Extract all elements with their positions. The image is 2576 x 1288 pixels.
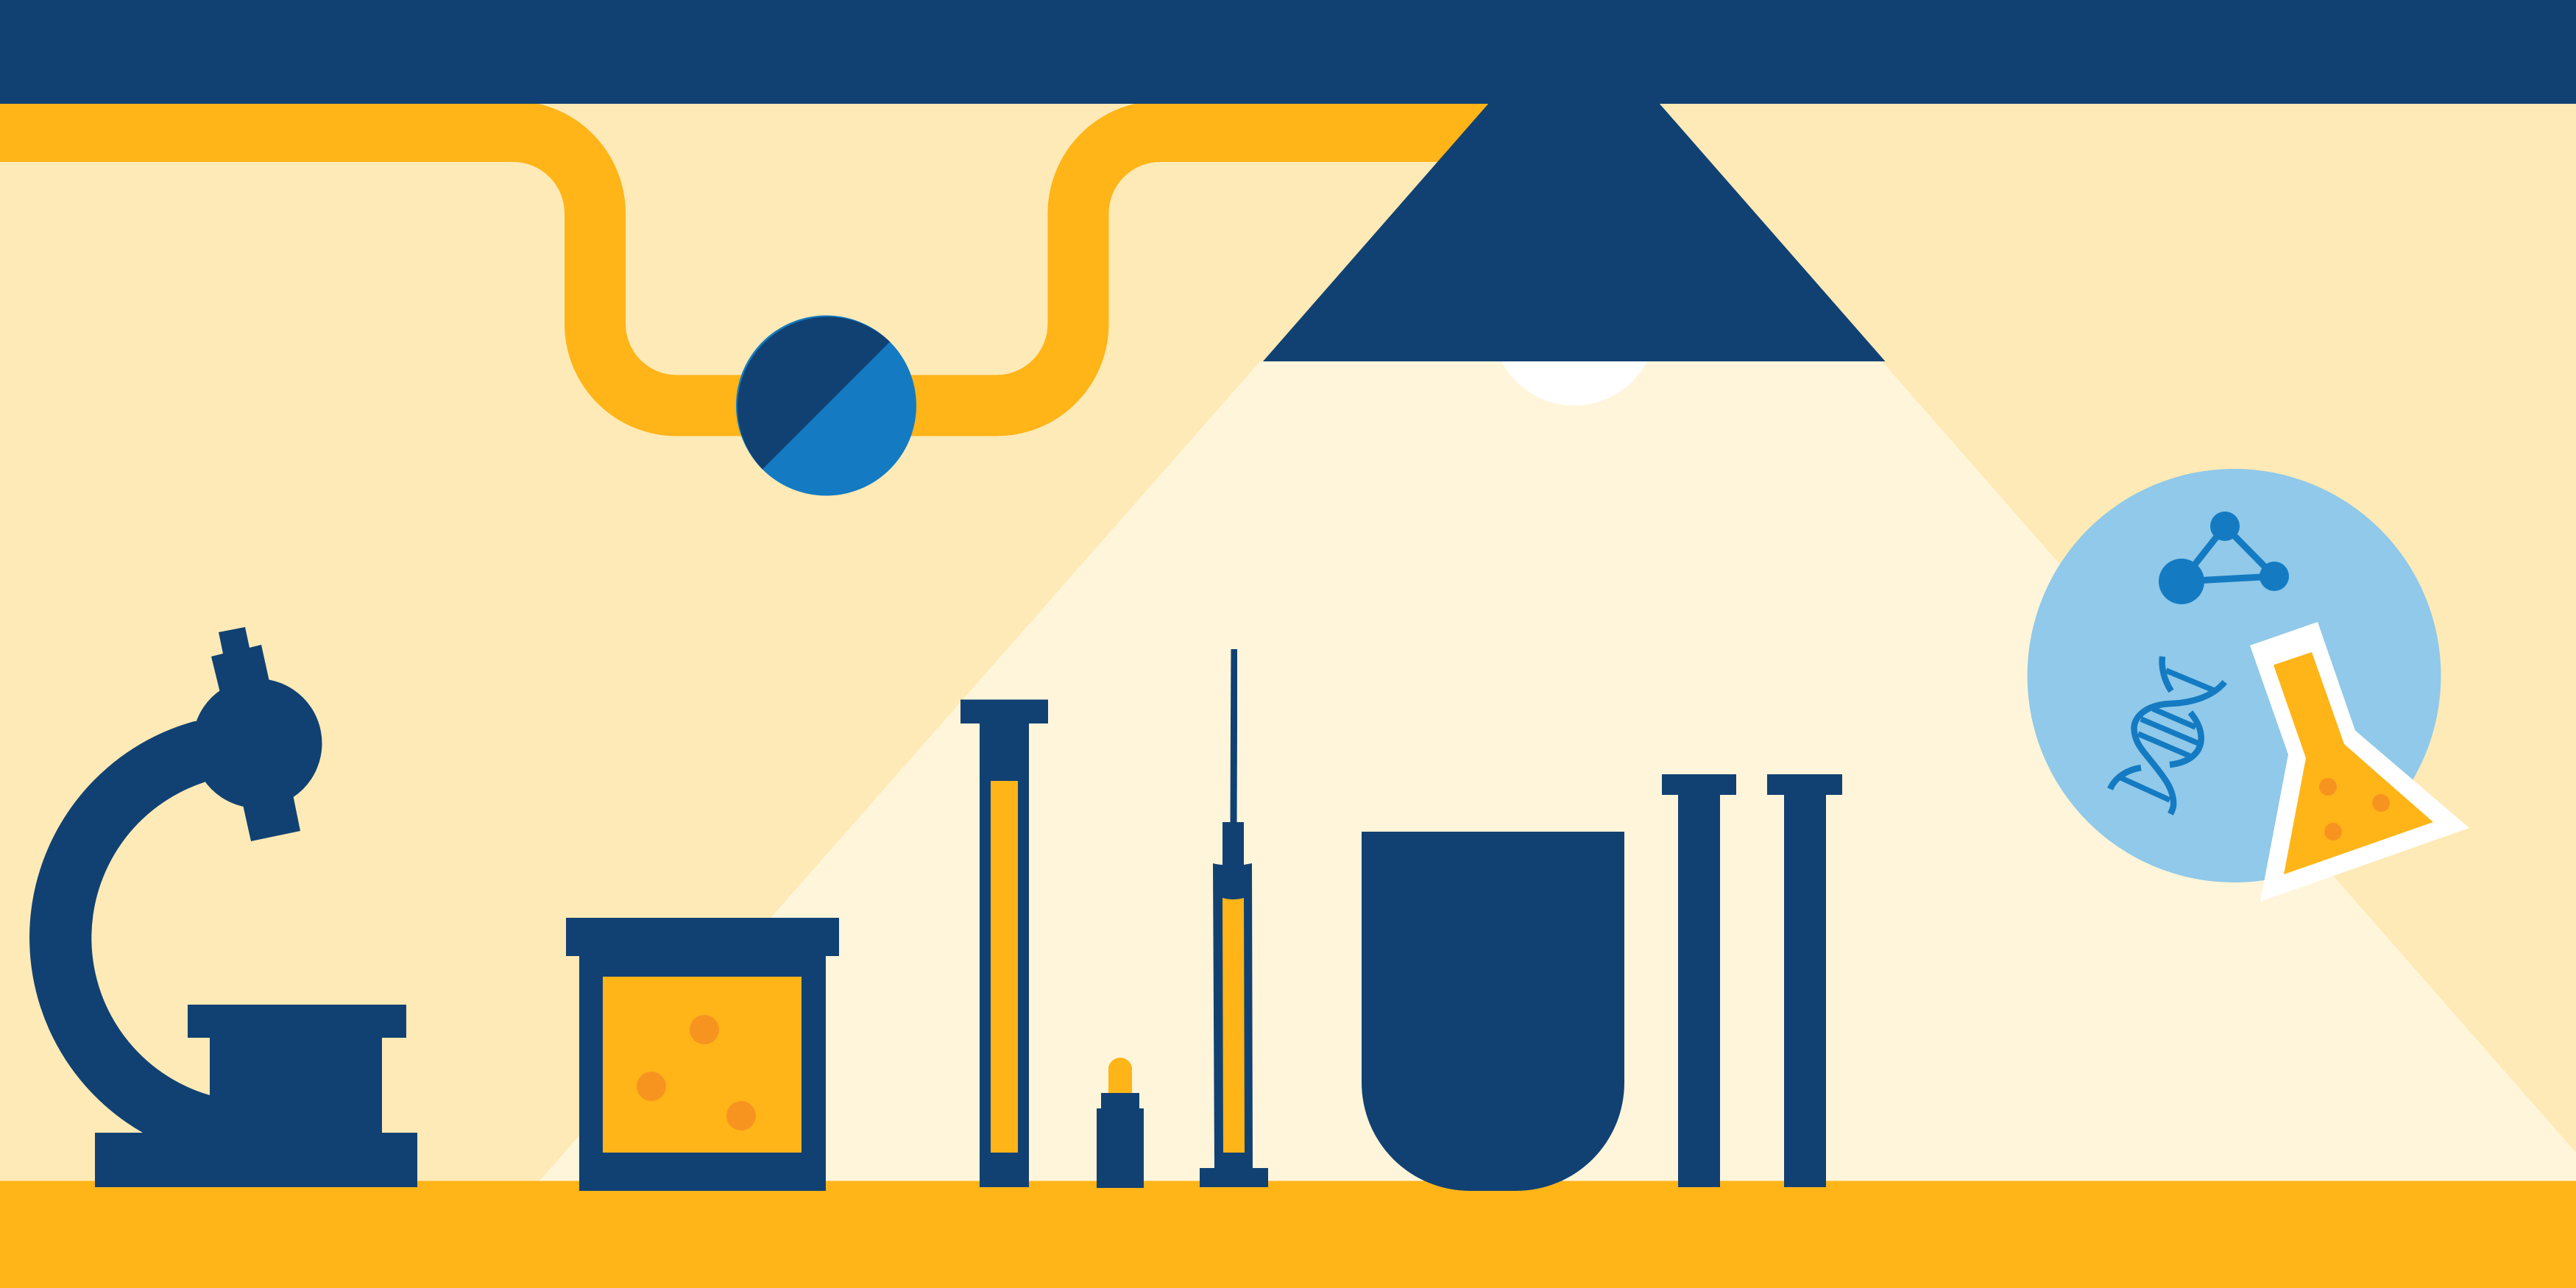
science badge	[2027, 469, 2441, 882]
test tube 1	[1662, 774, 1736, 1187]
floor	[0, 1181, 2576, 1288]
ceiling bar	[0, 0, 2576, 104]
molecule atoms	[2159, 512, 2289, 604]
microscope stage	[188, 1005, 406, 1038]
syringe	[1200, 649, 1268, 1187]
syringe liquid	[1222, 898, 1245, 1153]
microscope	[29, 627, 417, 1187]
microscope column	[210, 1034, 382, 1137]
jar bubbles	[637, 1015, 756, 1130]
microscope arm	[29, 718, 243, 1133]
pipe	[0, 131, 1546, 406]
lamp shade	[1263, 103, 1886, 361]
jar body	[579, 956, 826, 1191]
cylinder body	[980, 723, 1029, 1187]
flask bubbles	[2319, 778, 2390, 841]
valve circle	[736, 315, 916, 496]
badge circle	[2027, 469, 2441, 882]
needle	[1231, 649, 1237, 824]
molecule bonds	[2182, 526, 2274, 581]
flask liquid	[2274, 652, 2433, 874]
dropper collar	[1101, 1093, 1139, 1108]
bottle body	[1097, 1108, 1144, 1188]
microscope objective lens	[241, 784, 300, 841]
cylinder lid	[960, 699, 1048, 723]
syringe barrel	[1200, 822, 1268, 1187]
graduated cylinder	[960, 699, 1048, 1187]
microscope base	[95, 1133, 417, 1187]
test tube 2	[1767, 774, 1842, 1187]
jar	[566, 918, 839, 1191]
light beam	[536, 361, 2576, 1185]
beaker	[1362, 832, 1624, 1191]
dropper bulb	[1108, 1058, 1132, 1093]
dropper bottle	[1097, 1058, 1144, 1188]
icon: dna helix	[2110, 657, 2225, 814]
valve dark half	[737, 316, 890, 470]
flask outline	[2250, 622, 2469, 902]
microscope eyepiece	[211, 627, 271, 696]
lamp bulb	[1493, 241, 1656, 406]
microscope head	[193, 679, 322, 808]
jar lid	[566, 918, 839, 956]
pipe valve	[736, 315, 916, 496]
icon: flask	[2250, 622, 2469, 902]
cylinder liquid	[991, 781, 1018, 1153]
icon: molecule	[2159, 512, 2289, 604]
jar liquid	[603, 977, 802, 1153]
